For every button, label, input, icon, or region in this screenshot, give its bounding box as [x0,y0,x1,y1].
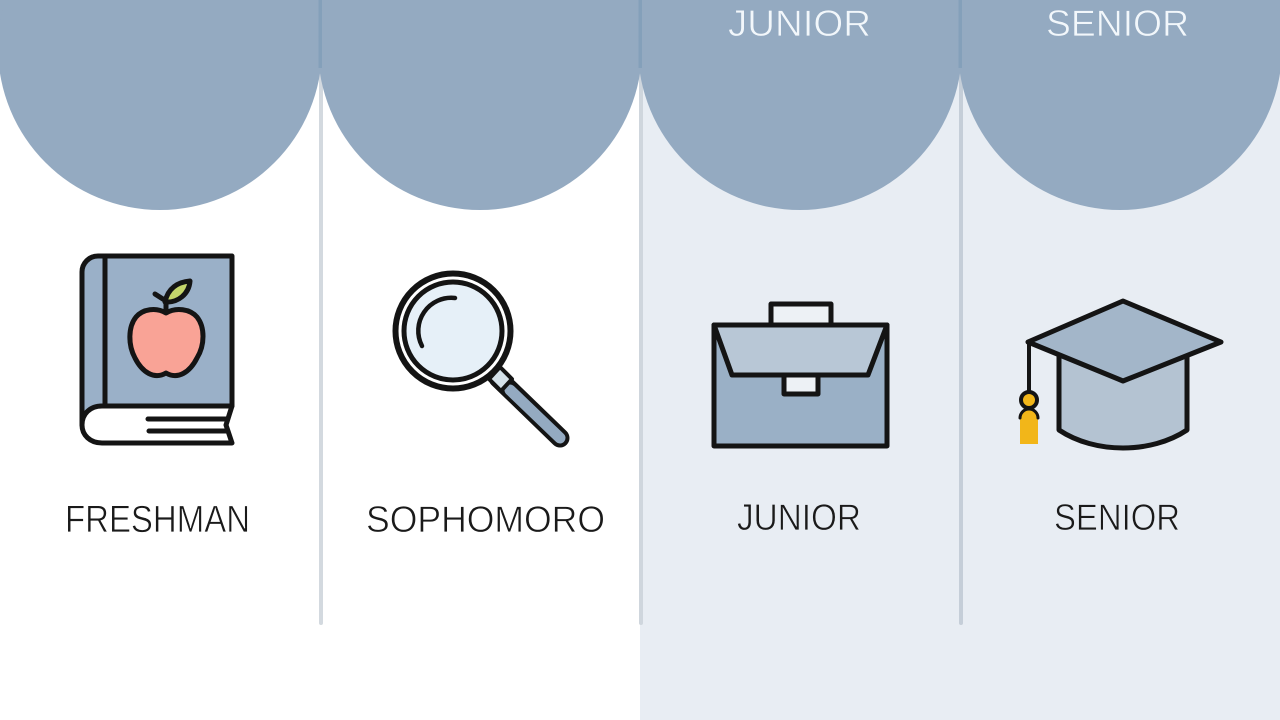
label: FRESHMAN: FRESHMAN [65,499,250,541]
header label: SENIOR: SENIOR [1046,3,1189,44]
icon: briefcase [714,304,887,446]
scalloped header band [0,0,1280,210]
icon: graduation cap [1020,301,1221,448]
header label: JUNIOR: JUNIOR [728,3,871,44]
column dividers [319,60,963,625]
panel: tinted background for junior and senior [640,0,1280,720]
icon: magnifying glass [396,274,560,438]
icon: book with apple [82,256,232,443]
label: JUNIOR: JUNIOR [737,497,861,538]
label: SOPHOMORO: SOPHOMORO [366,499,605,540]
label: SENIOR: SENIOR [1054,497,1180,538]
